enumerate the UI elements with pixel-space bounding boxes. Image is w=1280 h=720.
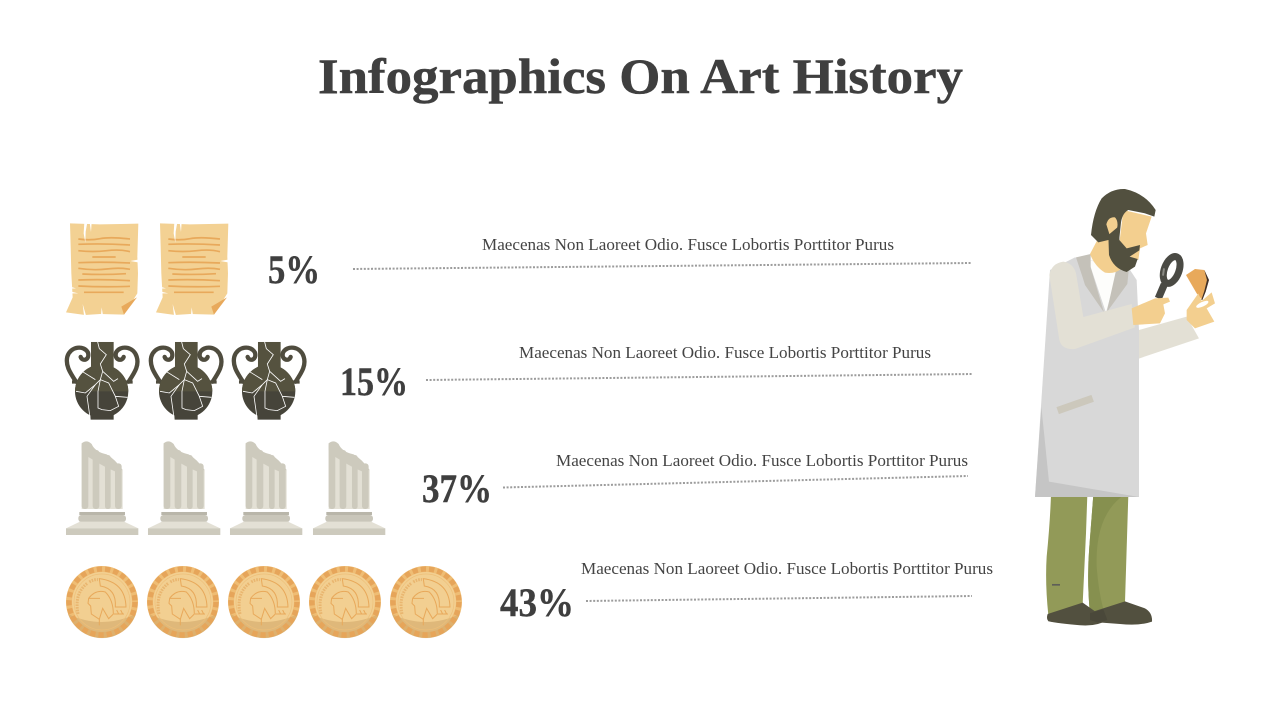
icon: broken columns (66, 441, 385, 535)
near arm (1049, 262, 1135, 349)
far arm (1137, 317, 1199, 359)
row 3: columns 37% (66, 441, 968, 535)
description 3: Maecenas Non Laoreet Odio. Fusce Lobortis Porttitor Purus (556, 451, 968, 470)
percentage 43%: 43% (500, 580, 574, 625)
illustration: art historian with magnifier (1035, 189, 1215, 626)
face (1118, 210, 1152, 260)
icon: scrolls (66, 222, 229, 315)
description 1: Maecenas Non Laoreet Odio. Fusce Lobortis Porttitor Purus (482, 235, 894, 254)
description 2: Maecenas Non Laoreet Odio. Fusce Lobortis Porttitor Purus (519, 343, 931, 362)
hair (1091, 189, 1156, 242)
dotted leader 3 (503, 476, 968, 488)
lab coat (1035, 257, 1139, 497)
ear (1106, 217, 1118, 235)
percentage 37%: 37% (422, 466, 492, 511)
icon: broken vases (67, 342, 304, 420)
icon: ancient coins (66, 566, 462, 638)
lapels (1076, 254, 1104, 312)
title: Infographics On Art History (318, 48, 963, 104)
percentage 15%: 15% (340, 359, 408, 404)
shirt (1088, 260, 1118, 313)
dotted leader 1 (353, 263, 971, 269)
beard (1108, 227, 1140, 272)
legs and shoes (1046, 495, 1152, 626)
shard (1186, 269, 1209, 300)
torso (1035, 254, 1199, 497)
magnifier (1158, 254, 1183, 298)
dotted leader 4 (586, 596, 972, 601)
row 1: scrolls 5% (66, 222, 971, 315)
row 4: coins 43% (66, 559, 993, 638)
near hand (1132, 298, 1170, 325)
description 4: Maecenas Non Laoreet Odio. Fusce Lobortis Porttitor Purus (581, 559, 993, 578)
neck (1090, 235, 1123, 273)
pocket (1058, 398, 1093, 411)
dotted leader 2 (426, 374, 972, 380)
head and hands (1049, 189, 1215, 349)
percentage 5%: 5% (268, 247, 320, 292)
far hand (1187, 292, 1215, 328)
row 2: vases 15% (67, 342, 972, 420)
